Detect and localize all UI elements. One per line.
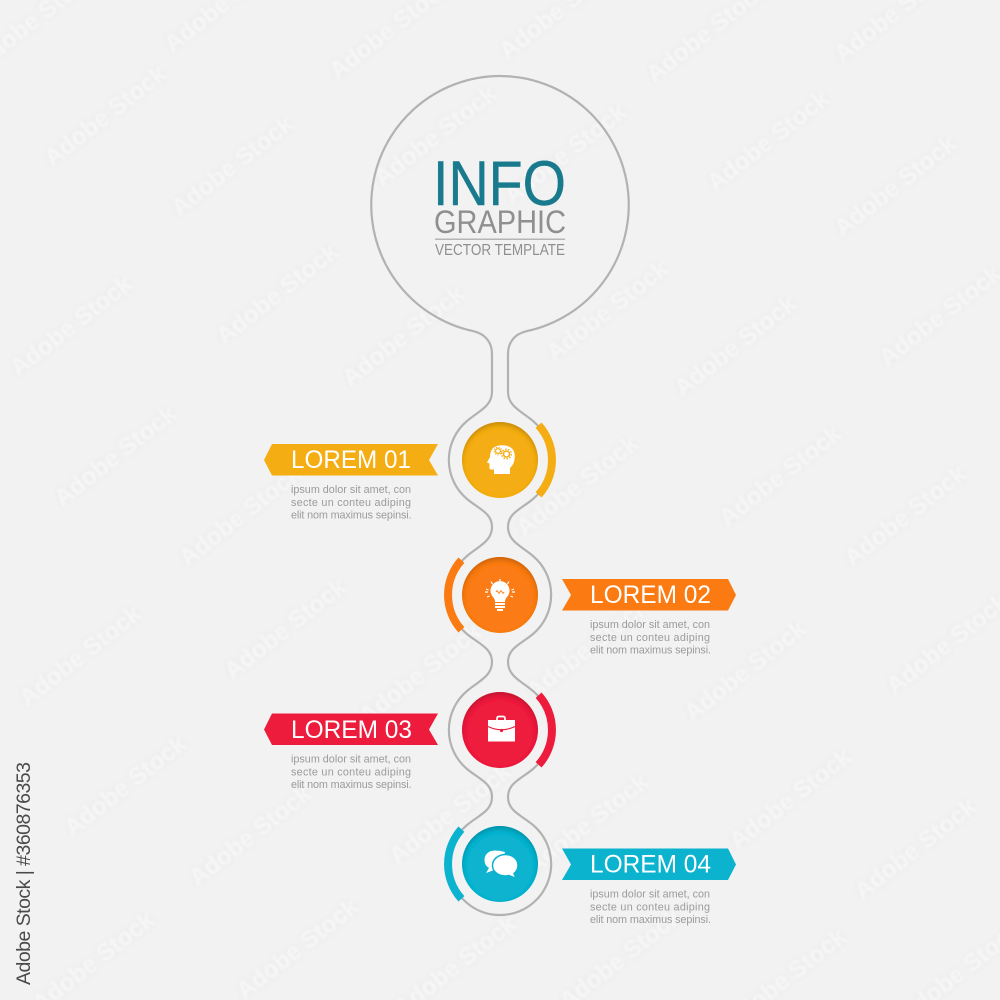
step 3 ribbon bbox=[264, 714, 438, 745]
icon: light bulb bbox=[485, 579, 515, 611]
watermark pattern: Adobe Stock bbox=[724, 743, 857, 855]
icon: head with gears bbox=[487, 445, 515, 474]
step 2 ribbon bbox=[562, 579, 736, 610]
watermark pattern: Adobe Stock bbox=[849, 793, 982, 905]
title: GRAPHIC bbox=[434, 204, 566, 240]
step 3 text bbox=[291, 754, 412, 791]
watermark pattern: Adobe Stock bbox=[49, 400, 182, 512]
step 2 circle bbox=[462, 557, 538, 633]
watermark pattern: Adobe Stock bbox=[499, 98, 632, 210]
step 3 text: ipsum dolor sit amet, con bbox=[291, 754, 411, 766]
step 1 text bbox=[291, 484, 412, 522]
step 1 arc bbox=[539, 425, 552, 495]
step 2 text: secte un conteu adiping bbox=[590, 632, 710, 644]
step 1 circle bbox=[462, 422, 538, 498]
stock id side text: Adobe Stock | #360876353 bbox=[13, 762, 35, 985]
step 2 text: ipsum dolor sit amet, con bbox=[590, 619, 710, 631]
step 4 text: secte un conteu adiping bbox=[590, 902, 710, 914]
watermark pattern: Adobe Stock bbox=[679, 615, 812, 727]
watermark pattern: Adobe Stock bbox=[669, 290, 802, 402]
step 2 bbox=[448, 557, 736, 656]
step 4 text bbox=[590, 888, 711, 926]
step 4 circle bbox=[462, 826, 538, 902]
watermark pattern: Adobe Stock bbox=[829, 130, 962, 242]
step 3 text: elit nom maximus sepinsi. bbox=[291, 779, 412, 791]
step 2 text: elit nom maximus sepinsi. bbox=[590, 644, 711, 656]
title: INFO bbox=[433, 149, 566, 219]
watermark pattern: Adobe Stock bbox=[174, 460, 307, 572]
watermark pattern: Adobe Stock bbox=[211, 238, 344, 350]
step 3 label: LOREM 03 bbox=[291, 716, 412, 744]
watermark pattern: Adobe Stock bbox=[702, 85, 835, 197]
watermark pattern: Adobe Stock bbox=[541, 255, 674, 367]
step 3 bbox=[264, 692, 552, 791]
step 4 bbox=[448, 826, 736, 926]
step 3 text: secte un conteu adiping bbox=[291, 766, 411, 778]
watermark pattern: Adobe Stock bbox=[511, 430, 644, 542]
step 1 ribbon bbox=[264, 444, 438, 476]
icon: briefcase bbox=[488, 716, 515, 742]
step 1 text: secte un conteu adiping bbox=[291, 497, 411, 509]
watermark pattern: Adobe Stock bbox=[369, 80, 502, 192]
watermark pattern: Adobe Stock bbox=[39, 60, 172, 172]
watermark pattern: Adobe Stock bbox=[5, 270, 138, 382]
step 4 text: elit nom maximus sepinsi. bbox=[590, 914, 711, 926]
step 1 bbox=[264, 422, 552, 522]
step 2 arc bbox=[448, 560, 461, 630]
icon: chat bubbles bbox=[484, 850, 518, 878]
step 1 label: LOREM 01 bbox=[291, 446, 411, 474]
title: VECTOR TEMPLATE bbox=[435, 242, 565, 259]
watermark pattern: Adobe Stock bbox=[839, 460, 972, 572]
connected outline bbox=[371, 76, 629, 915]
step 4 arc bbox=[448, 829, 461, 899]
watermark pattern: Adobe Stock bbox=[184, 780, 317, 892]
step 4 ribbon bbox=[562, 848, 736, 880]
step 1 text: elit nom maximus sepinsi. bbox=[291, 510, 412, 522]
title bbox=[433, 149, 566, 259]
watermark pattern: Adobe Stock bbox=[521, 768, 654, 880]
step 1 text: ipsum dolor sit amet, con bbox=[291, 484, 411, 496]
step 2 label: LOREM 02 bbox=[590, 581, 711, 609]
watermark pattern: Adobe Stock bbox=[59, 730, 192, 842]
watermark pattern: Adobe Stock bbox=[354, 618, 487, 730]
watermark pattern: Adobe Stock bbox=[166, 110, 299, 222]
step 2 text bbox=[590, 619, 711, 656]
watermark pattern: Adobe Stock bbox=[14, 600, 147, 712]
watermark pattern: Adobe Stock bbox=[384, 758, 517, 870]
step 3 circle bbox=[462, 692, 538, 768]
watermark pattern: Adobe Stock bbox=[714, 420, 847, 532]
step 3 arc bbox=[539, 695, 552, 765]
step 4 text: ipsum dolor sit amet, con bbox=[590, 888, 710, 900]
watermark pattern: Adobe Stock bbox=[219, 573, 352, 685]
step 4 label: LOREM 04 bbox=[590, 850, 711, 878]
watermark pattern: Adobe Stock bbox=[337, 280, 470, 392]
watermark pattern: Adobe Stock bbox=[521, 593, 654, 705]
